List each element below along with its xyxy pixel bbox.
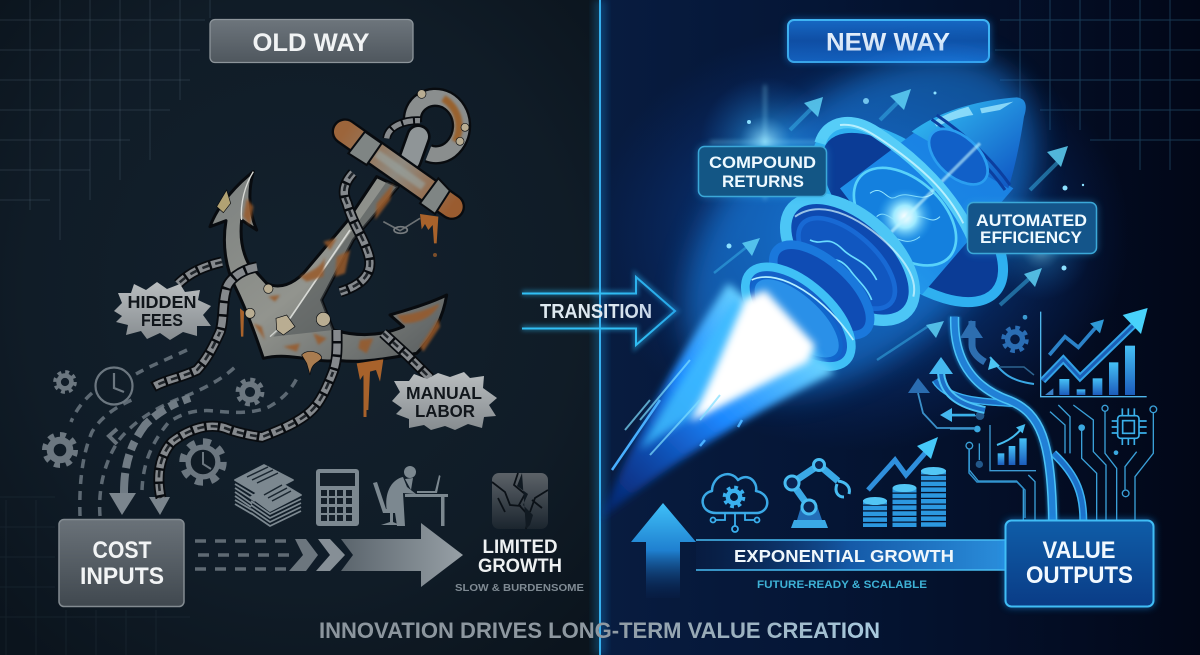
banner: exponential growth: EXPONENTIAL GROWTH bbox=[734, 546, 954, 566]
badge: old way: OLD WAY bbox=[252, 29, 370, 57]
label: automated efficiency: AUTOMATED bbox=[976, 212, 1087, 230]
growth arrows bbox=[714, 89, 1068, 360]
box: value outputs bbox=[1005, 520, 1154, 607]
rocket bbox=[728, 97, 1032, 384]
flow arrow: old way bbox=[195, 523, 463, 587]
callout: hidden fees bbox=[114, 282, 211, 340]
background right panel bbox=[600, 0, 1200, 655]
callout: manual labor bbox=[392, 372, 497, 430]
rocket upper ring front bbox=[820, 123, 973, 240]
banner: exponential growth: FUTURE-READY & SCALABLE bbox=[757, 579, 927, 591]
rust drip long bbox=[364, 365, 366, 417]
anchor ring bbox=[412, 97, 462, 155]
icon: rusty anchor bbox=[210, 90, 469, 410]
rocket body bbox=[840, 128, 1013, 295]
box: value outputs: VALUE bbox=[1042, 537, 1116, 564]
text: limited growth bbox=[455, 537, 584, 594]
icon: cloud bbox=[703, 474, 767, 532]
icon: robot arm bbox=[785, 460, 849, 528]
dashed cost paths bbox=[71, 350, 297, 516]
circuit network bbox=[935, 308, 1157, 521]
box: cost inputs bbox=[59, 520, 184, 606]
rocket exhaust bbox=[600, 283, 835, 520]
bottom title: INNOVATION DRIVES LONG-TERM VALUE CREATION bbox=[319, 618, 880, 643]
anchor shank top bbox=[410, 137, 418, 160]
rocket glow bbox=[590, 0, 1130, 460]
text: limited growth: GROWTH bbox=[478, 556, 562, 577]
anchor body bbox=[210, 172, 447, 361]
side arrows bbox=[908, 320, 1034, 518]
badge: new way: NEW WAY bbox=[826, 28, 950, 56]
icon: gear blue bbox=[1004, 328, 1026, 351]
label: compound returns bbox=[698, 146, 827, 197]
badge: old way bbox=[210, 20, 413, 62]
light burst bbox=[700, 77, 1091, 300]
rocket nose highlights bbox=[933, 102, 1013, 127]
icon: clock bbox=[96, 368, 132, 404]
callout: hidden fees: HIDDEN bbox=[128, 292, 196, 312]
background left panel bbox=[0, 0, 600, 655]
callout: manual labor: MANUAL bbox=[406, 383, 482, 403]
circuit traces bbox=[950, 405, 1157, 521]
chains over anchor bbox=[220, 173, 430, 378]
icon: coin stacks and arrow bbox=[863, 437, 946, 527]
icon: large gear bbox=[45, 435, 75, 465]
label: compound returns: RETURNS bbox=[722, 173, 804, 191]
anchor facets and rust bbox=[217, 90, 469, 375]
rocket chamber bbox=[919, 118, 998, 195]
chart: small growth chart bbox=[990, 424, 1036, 471]
anchor stock bbox=[345, 132, 452, 214]
box: cost inputs: INPUTS bbox=[80, 563, 164, 590]
badge: new way bbox=[787, 20, 990, 62]
banner: exponential growth bbox=[696, 540, 1006, 591]
icon: clock gear bbox=[183, 442, 223, 482]
flowing ribbons bbox=[935, 317, 1083, 521]
icon: gear right bbox=[238, 380, 262, 404]
icon: cracked block bbox=[492, 473, 548, 529]
text: limited growth: SLOW & BURDENSOME bbox=[455, 582, 584, 594]
rocket nozzle rings bbox=[758, 229, 885, 351]
callout: manual labor: LABOR bbox=[415, 401, 475, 421]
callout: hidden fees: FEES bbox=[141, 310, 183, 330]
divider line bbox=[594, 0, 606, 655]
transition arrow: TRANSITION bbox=[540, 301, 652, 323]
rocket nose bbox=[912, 97, 1026, 188]
anchor rust drips bbox=[240, 214, 438, 410]
icon: chip bbox=[1112, 408, 1147, 445]
big up arrow bbox=[631, 503, 696, 598]
label: automated efficiency: EFFICIENCY bbox=[980, 229, 1082, 247]
box: cost inputs: COST bbox=[92, 537, 152, 564]
transition arrow bbox=[522, 276, 676, 346]
icon: calculator bbox=[316, 469, 359, 526]
rocket back ring bbox=[788, 97, 1032, 333]
text: limited growth: LIMITED bbox=[482, 537, 558, 558]
rocket mid ring bbox=[764, 175, 936, 343]
chart: main growth chart bbox=[1041, 308, 1148, 397]
icon: tired worker at desk bbox=[373, 466, 448, 526]
box: value outputs: OUTPUTS bbox=[1026, 562, 1133, 589]
circuit dots bbox=[974, 411, 1118, 468]
icon: paper stacks bbox=[235, 465, 301, 526]
sparkle dots bbox=[726, 92, 1084, 319]
icon: small gear bbox=[55, 372, 75, 392]
label: automated efficiency bbox=[967, 202, 1097, 254]
chains bbox=[153, 262, 337, 498]
anchor small chains bbox=[383, 121, 420, 233]
label: compound returns: COMPOUND bbox=[709, 154, 816, 172]
